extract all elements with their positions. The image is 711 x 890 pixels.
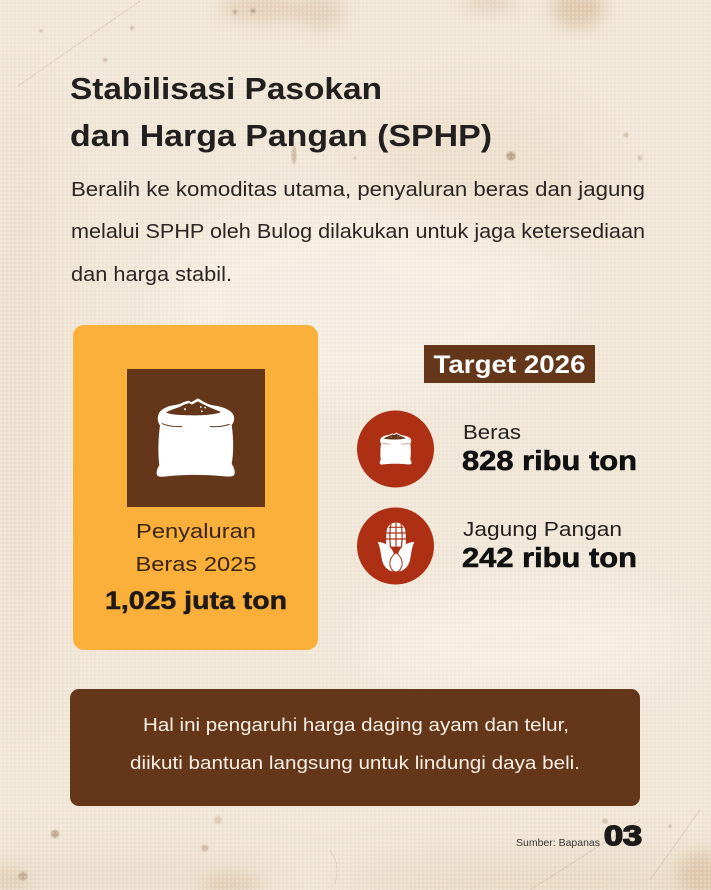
title <box>70 71 492 153</box>
target: beras <box>357 410 637 488</box>
intro paragraph <box>71 179 645 286</box>
panel: penyaluran beras 2025 <box>73 325 318 650</box>
source: Sumber: Bapanas <box>516 837 600 849</box>
label: jagung pangan: Jagung Pangan <box>463 519 622 541</box>
intro paragraph: dan harga stabil. <box>71 264 232 286</box>
icon: corn circle <box>357 508 434 584</box>
label: penyaluran beras <box>136 520 256 576</box>
value: 1,025 juta ton: 1,025 juta ton <box>105 587 287 615</box>
page number: 03 <box>604 820 642 851</box>
title: dan Harga Pangan (SPHP) <box>70 118 492 153</box>
intro paragraph: melalui SPHP oleh Bulog dilakukan untuk jaga ketersediaan <box>71 221 645 243</box>
value: 828 ribu ton: 828 ribu ton <box>462 445 637 476</box>
target: jagung pangan <box>357 508 637 584</box>
callout: dampak harga dan bantuan: diikuti bantuan langsung untuk lindungi daya beli. <box>130 753 580 773</box>
icon: rice sack <box>127 369 265 507</box>
title: Stabilisasi Pasokan <box>70 71 382 106</box>
intro paragraph: Beralih ke komoditas utama, penyaluran beras dan jagung <box>71 179 645 201</box>
value: 242 ribu ton: 242 ribu ton <box>462 542 637 573</box>
callout: dampak harga dan bantuan: Hal ini pengaruhi harga daging ayam dan telur, <box>143 715 569 735</box>
badge: target 2026: Target 2026 <box>434 351 586 379</box>
label: penyaluran beras: Penyaluran <box>136 520 256 543</box>
badge: target 2026 <box>424 345 595 383</box>
callout: dampak harga dan bantuan <box>70 689 640 806</box>
icon: rice sack circle <box>357 410 434 488</box>
label: penyaluran beras: Beras 2025 <box>136 553 256 576</box>
label: beras: Beras <box>463 422 521 444</box>
